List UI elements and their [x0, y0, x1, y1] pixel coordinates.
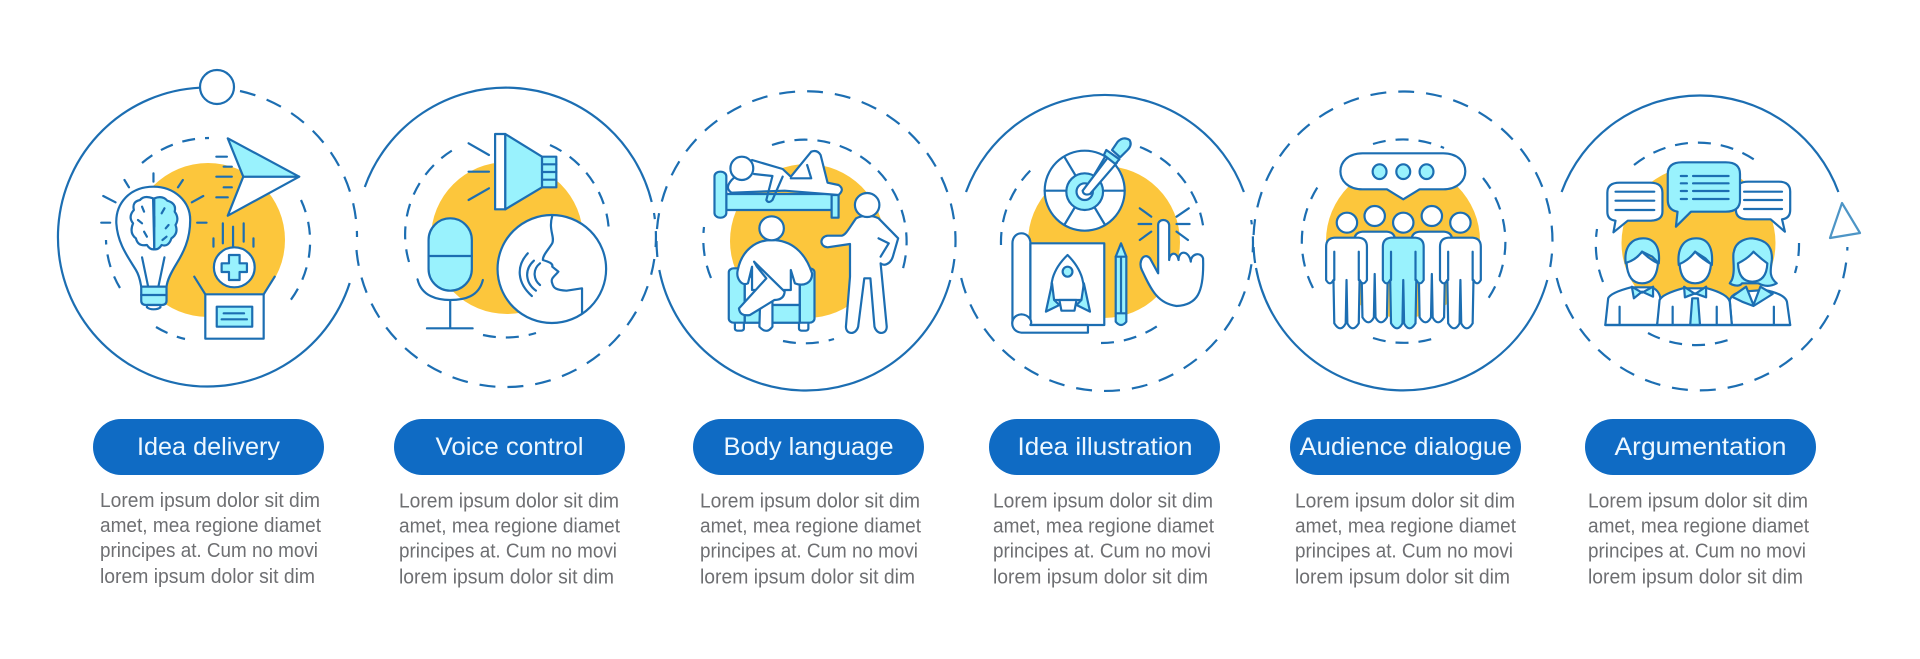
description text: principes at. Cum no movi: [993, 540, 1211, 562]
description text: amet, mea regione diamet: [700, 516, 921, 538]
description text: Lorem ipsum dolor sit dim: [993, 490, 1213, 512]
label pill: Voice control: [436, 433, 584, 461]
inner dashed ring: [405, 145, 609, 338]
description text: Lorem ipsum dolor sit dim: [1588, 490, 1808, 512]
description text: amet, mea regione diamet: [993, 516, 1214, 538]
description text: lorem ipsum dolor sit dim: [399, 566, 614, 588]
description text: principes at. Cum no movi: [700, 540, 918, 562]
connecting ring path: [58, 88, 1847, 391]
icon: people on bed, armchair and standing: [714, 151, 898, 333]
description text: principes at. Cum no movi: [1588, 540, 1806, 562]
end marker triangle: [1830, 203, 1860, 238]
yellow backdrop: [1028, 166, 1180, 318]
description text: amet, mea regione diamet: [1588, 516, 1809, 538]
description text: [700, 490, 921, 588]
description text: amet, mea regione diamet: [1295, 516, 1516, 538]
yellow backdrop: [131, 163, 285, 317]
label pill: [394, 419, 625, 475]
label pill: Argumentation: [1614, 433, 1786, 461]
inner dashed ring: [703, 140, 907, 343]
yellow backdrop: [1622, 166, 1776, 320]
label pill: [693, 419, 924, 475]
description text: amet, mea regione diamet: [100, 515, 321, 537]
description text: lorem ipsum dolor sit dim: [100, 566, 315, 588]
inner dashed ring: [106, 138, 310, 339]
icon: speaker, microphone and speaking face: [418, 134, 606, 328]
icon: colour wheel, dropper, rocket sketch, pencil and hand: [1012, 138, 1203, 333]
panel: audience dialogue: [1290, 139, 1521, 588]
description text: lorem ipsum dolor sit dim: [700, 566, 915, 588]
panel: idea illustration: [989, 138, 1220, 588]
description text: [100, 490, 321, 588]
description text: lorem ipsum dolor sit dim: [1588, 566, 1803, 588]
description text: amet, mea regione diamet: [399, 516, 620, 538]
label pill: Body language: [724, 433, 894, 461]
inner dashed ring: [1302, 139, 1505, 343]
description text: [1295, 490, 1516, 588]
label pill: [1585, 419, 1816, 475]
icon: lightbulb, brain, paper plane and box: [101, 138, 299, 339]
panel: argumentation: [1585, 143, 1816, 588]
description text: Lorem ipsum dolor sit dim: [399, 490, 619, 512]
yellow backdrop: [1326, 164, 1480, 318]
label pill: [989, 419, 1220, 475]
icon: three speakers with speech bubbles: [1605, 162, 1790, 325]
start marker circle: [200, 70, 234, 104]
icon: group of people with speech bubble: [1326, 153, 1481, 328]
yellow backdrop: [730, 164, 884, 318]
panel: idea delivery: [93, 138, 324, 588]
description text: principes at. Cum no movi: [1295, 540, 1513, 562]
description text: principes at. Cum no movi: [100, 540, 318, 562]
description text: lorem ipsum dolor sit dim: [993, 566, 1208, 588]
yellow backdrop: [431, 162, 583, 314]
description text: Lorem ipsum dolor sit dim: [100, 490, 320, 512]
description text: principes at. Cum no movi: [399, 540, 617, 562]
inner dashed ring: [1596, 143, 1799, 345]
panel: voice control: [394, 134, 625, 589]
description text: [1588, 490, 1809, 588]
label pill: Idea delivery: [137, 433, 281, 461]
inner dashed ring: [1001, 147, 1204, 343]
label pill: Idea illustration: [1018, 433, 1192, 461]
label pill: Audience dialogue: [1300, 433, 1512, 461]
description text: lorem ipsum dolor sit dim: [1295, 566, 1510, 588]
label pill: [1290, 419, 1521, 475]
description text: Lorem ipsum dolor sit dim: [1295, 490, 1515, 512]
label pill: [93, 419, 324, 475]
description text: [399, 490, 620, 588]
description text: [993, 490, 1214, 588]
description text: Lorem ipsum dolor sit dim: [700, 490, 920, 512]
panel: body language: [693, 140, 924, 588]
